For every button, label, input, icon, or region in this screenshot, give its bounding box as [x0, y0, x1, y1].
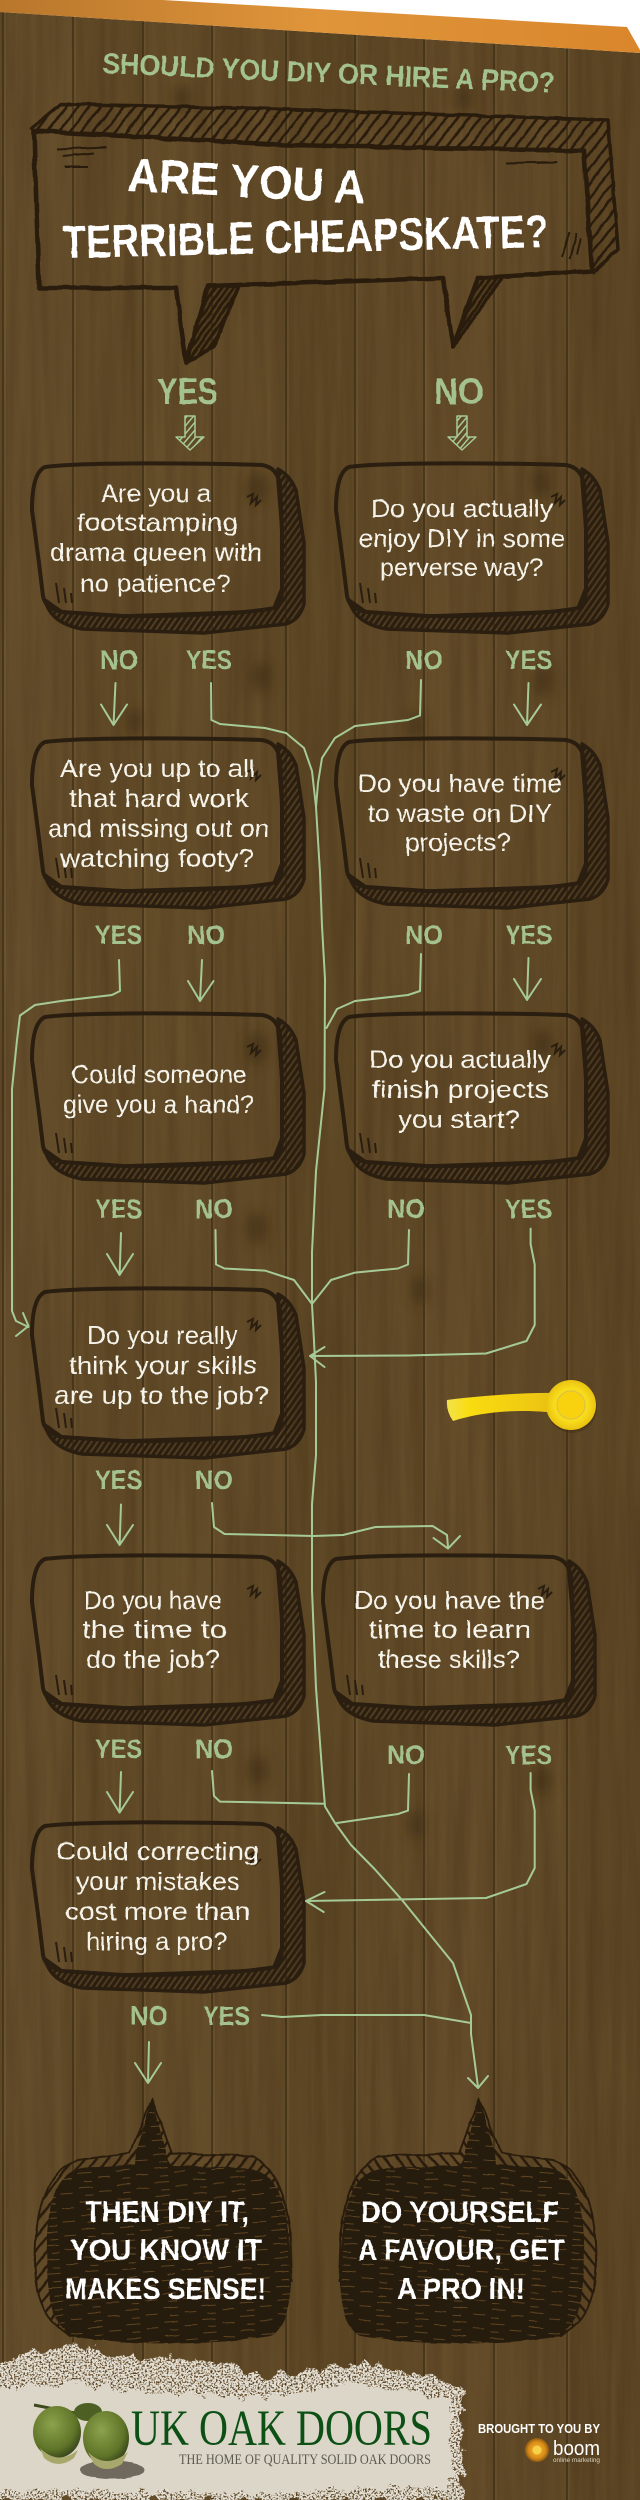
logo: UK Oak Doors wordmark: UK OAK DOORS	[131, 2401, 432, 2457]
question box: footstamping drama queen: footstamping	[77, 509, 238, 537]
yes and no labels: YES	[95, 920, 142, 950]
question box: footstamping drama queen: Are you a	[101, 480, 211, 508]
question box: correcting mistakes	[32, 1822, 304, 1992]
question box: time to do the job: the time to	[82, 1616, 227, 1644]
question box: time to do the job	[32, 1555, 304, 1725]
question box: finish projects: Do you actually	[369, 1046, 552, 1074]
final bubble: get a pro in: A FAVOUR, GET	[358, 2234, 565, 2267]
question box: finish projects: you start?	[398, 1106, 520, 1134]
question box: hard work and footy: and missing out on	[48, 815, 269, 843]
final bubble: get a pro in: DO YOURSELF	[361, 2196, 559, 2229]
question box: time to do the job: Do you have	[84, 1587, 222, 1615]
yes and no labels: YES	[505, 920, 552, 950]
question box: correcting mistakes: your mistakes	[76, 1868, 240, 1896]
flow lines and arrows	[12, 680, 541, 2088]
question box: footstamping drama queen: no patience?	[80, 570, 231, 598]
question box: time to learn skills: time to learn	[369, 1616, 531, 1644]
yes and no labels: YES	[95, 1194, 142, 1224]
question box: time to waste: to waste on DIY	[368, 800, 552, 828]
question box: hard work and footy: Are you up to all	[60, 755, 255, 783]
question box: skills up to the job: think your skills	[69, 1352, 257, 1380]
heading: should you DIY or hire a pro: SHOULD YOU DIY OR HIRE A PRO?	[102, 48, 556, 100]
footer torn paper panel	[0, 2346, 463, 2500]
yes and no labels	[95, 645, 552, 2031]
question box: time to learn skills: these skills?	[378, 1646, 520, 1674]
logo: UK Oak Doors wordmark	[131, 2401, 432, 2468]
logo: UK Oak Doors wordmark: THE HOME OF QUALITY SOLID OAK DOORS	[179, 2452, 431, 2468]
yes and no labels: YES	[505, 1740, 552, 1770]
yes and no labels: YES	[95, 1734, 142, 1764]
logo: acorns	[33, 2403, 144, 2479]
yes and no labels: NO	[387, 1194, 425, 1224]
final bubble: then DIY it: YOU KNOW IT	[70, 2234, 262, 2267]
yes and no labels: NO	[387, 1740, 425, 1770]
big yes no choices	[157, 371, 484, 412]
question box: hard work and footy: that hard work	[69, 785, 250, 813]
question box: time to learn skills: Do you have the	[354, 1587, 545, 1615]
question box: footstamping drama queen	[32, 463, 304, 633]
yes and no labels: YES	[505, 645, 552, 675]
question box: enjoy DIY: enjoy DIY in some	[359, 525, 565, 553]
question box: enjoy DIY	[336, 463, 608, 633]
question box: time to waste: projects?	[405, 829, 511, 857]
final bubble: get a pro in: A PRO IN!	[397, 2273, 525, 2306]
question box: time to do the job: do the job?	[86, 1646, 220, 1674]
question box: give you a hand	[32, 1013, 304, 1183]
main speech bubble: are you a terrible cheapskate: TERRIBLE CHEAPSKATE?	[62, 205, 549, 268]
question box: correcting mistakes: hiring a pro?	[86, 1928, 227, 1956]
question box: time to waste: Do you have time	[358, 770, 562, 798]
main speech bubble: are you a terrible cheapskate	[31, 104, 618, 363]
yes and no labels: NO	[195, 1465, 233, 1495]
big yes no choices: YES	[157, 371, 218, 412]
question box: correcting mistakes: Could correcting	[56, 1838, 259, 1866]
question box: time to learn skills	[323, 1555, 595, 1725]
yes and no labels: YES	[505, 1194, 552, 1224]
final bubble: get a pro in	[339, 2099, 596, 2344]
final bubble: then DIY it: MAKES SENSE!	[65, 2273, 266, 2306]
question box: enjoy DIY: perverse way?	[380, 554, 543, 582]
credit: brought to you by boom online marketing: online marketing	[553, 2457, 600, 2464]
main speech bubble: are you a terrible cheapskate: ARE YOU A	[126, 148, 367, 213]
icon: hatched down arrow no	[448, 416, 476, 450]
credit: brought to you by boom online marketing: BROUGHT TO YOU BY	[478, 2422, 601, 2436]
yes and no labels: NO	[405, 920, 443, 950]
yes and no labels: NO	[195, 1734, 233, 1764]
yes and no labels: NO	[100, 645, 138, 675]
question box: skills up to the job	[32, 1288, 304, 1458]
final bubble: then DIY it: THEN DIY IT,	[85, 2196, 249, 2229]
question box: give you a hand: Could someone	[71, 1061, 247, 1089]
credit: brought to you by boom online marketing	[478, 2422, 601, 2464]
yes and no labels: NO	[130, 2001, 168, 2031]
question box: give you a hand: give you a hand?	[63, 1091, 254, 1119]
question box: correcting mistakes: cost more than	[65, 1898, 250, 1926]
yes and no labels: NO	[405, 645, 443, 675]
question box: finish projects	[336, 1013, 608, 1183]
question box: finish projects: finish projects	[372, 1076, 549, 1104]
icon: yellow door handle	[447, 1380, 597, 1433]
yes and no labels: NO	[187, 920, 225, 950]
credit: brought to you by boom online marketing: boom	[553, 2438, 600, 2460]
question box: hard work and footy	[32, 738, 304, 908]
icon: hatched down arrow yes	[176, 416, 204, 450]
big yes no choices: NO	[434, 371, 484, 412]
question box: skills up to the job: are up to the job?	[54, 1382, 269, 1410]
question box: footstamping drama queen: drama queen with	[50, 539, 262, 567]
final bubble: then DIY it	[35, 2099, 292, 2344]
yes and no labels: NO	[195, 1194, 233, 1224]
question box: hard work and footy: watching footy?	[59, 845, 254, 873]
yes and no labels: YES	[186, 645, 232, 675]
question box: enjoy DIY: Do you actually	[371, 495, 554, 523]
question box: time to waste	[336, 738, 608, 908]
orange top edge of the board	[0, 0, 640, 53]
yes and no labels: YES	[203, 2001, 250, 2031]
question box: skills up to the job: Do you really	[87, 1322, 239, 1350]
yes and no labels: YES	[95, 1465, 142, 1495]
